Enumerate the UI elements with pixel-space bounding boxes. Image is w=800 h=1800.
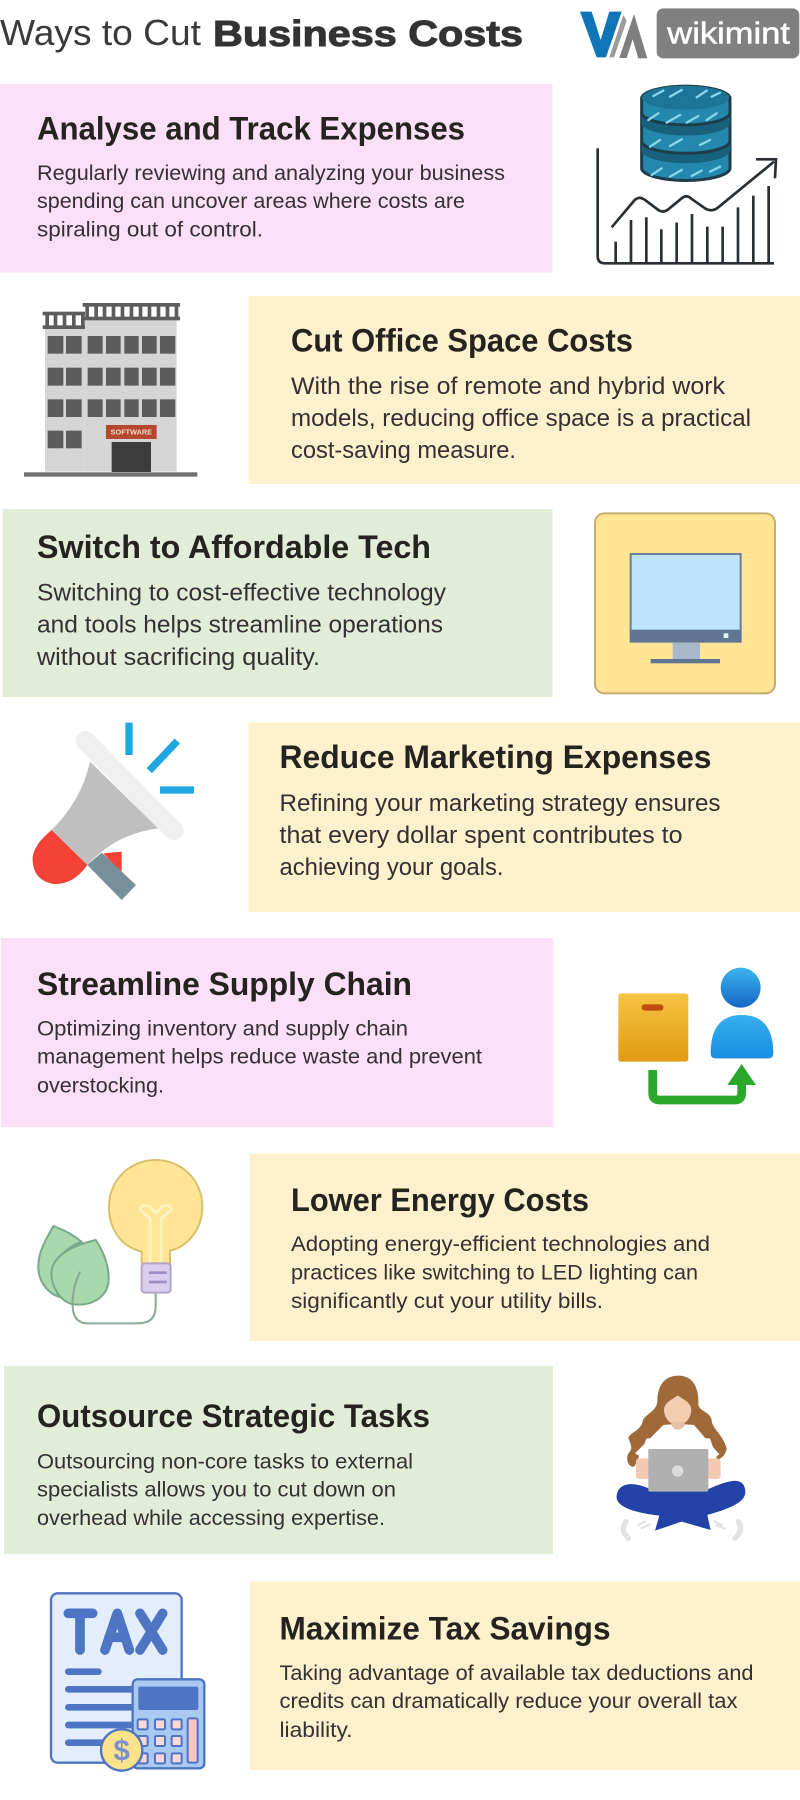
- text block: analyse: Regularly reviewing and analyzing your business: [37, 162, 505, 185]
- text block: energy: significantly cut your utility bills.: [291, 1290, 603, 1313]
- icon: light bulb and leaves: [38, 1160, 202, 1323]
- text block: energy: [291, 1233, 710, 1313]
- text block: tax savings: Taking advantage of available tax deductions and: [280, 1662, 754, 1685]
- text block: analyse: spiraling out of control.: [37, 218, 263, 242]
- text block: supply chain: management helps reduce waste and prevent: [37, 1044, 482, 1068]
- text block: outsource: specialists allows you to cut down on: [37, 1478, 396, 1502]
- text block: office space: With the rise of remote and hybrid work: [291, 373, 726, 400]
- text block: office space: [291, 373, 751, 464]
- text block: marketing: [280, 790, 720, 881]
- text block: outsource: [37, 1450, 413, 1530]
- heading: analyse: Analyse and Track Expenses: [37, 110, 465, 146]
- text block: marketing: achieving your goals.: [280, 854, 504, 881]
- icon: tax form and calculator: [51, 1593, 204, 1771]
- panel: lower energy costs: [250, 1154, 800, 1341]
- text block: marketing: that every dollar spent contributes to: [280, 822, 682, 849]
- text block: affordable tech: Switching to cost-effective technology: [37, 580, 446, 606]
- icon: database and growth chart: [598, 86, 776, 263]
- text block: office space: models, reducing office space is a practical: [291, 405, 751, 432]
- heading: office space: Cut Office Space Costs: [291, 322, 633, 358]
- logo: wikimint: wikimint: [666, 16, 791, 50]
- heading: marketing: Reduce Marketing Expenses: [280, 739, 712, 775]
- panel: reduce marketing expenses: [248, 722, 800, 912]
- title: [0, 12, 523, 54]
- panel: cut office space costs: [248, 296, 800, 484]
- text block: analyse: [37, 162, 505, 242]
- text block: office space: cost-saving measure.: [291, 437, 516, 464]
- heading: supply chain: Streamline Supply Chain: [37, 966, 412, 1002]
- text block: supply chain: overstocking.: [37, 1074, 164, 1098]
- text block: affordable tech: [36, 580, 446, 671]
- text block: outsource: Outsourcing non-core tasks to external: [37, 1450, 413, 1474]
- heading: tax savings: Maximize Tax Savings: [280, 1610, 610, 1646]
- text block: energy: practices like switching to LED lighting can: [291, 1262, 698, 1284]
- text block: affordable tech: and tools helps streamline operations: [37, 612, 443, 638]
- text block: tax savings: [280, 1662, 754, 1742]
- icon: box, person and arrow: [618, 968, 773, 1100]
- heading: outsource: Outsource Strategic Tasks: [37, 1398, 430, 1434]
- text block: outsource: overhead while accessing expertise.: [37, 1507, 385, 1530]
- text block: marketing: Refining your marketing strategy ensures: [280, 790, 720, 817]
- panel: maximize tax savings: [250, 1582, 800, 1770]
- title: Business Costs: [213, 13, 523, 54]
- text block: supply chain: Optimizing inventory and supply chain: [37, 1016, 408, 1040]
- heading: affordable tech: Switch to Affordable Tech: [37, 529, 431, 565]
- icon: woman working on laptop: [617, 1376, 745, 1538]
- logo: wikimint: [580, 8, 799, 58]
- text block: tax savings: credits can dramatically reduce your overall tax: [280, 1690, 738, 1713]
- text block: supply chain: [37, 1016, 482, 1098]
- icon: megaphone: [33, 723, 194, 900]
- text block: tax savings: liability.: [280, 1719, 352, 1742]
- text block: affordable tech: without sacrificing quality.: [36, 644, 320, 671]
- icon: office building: SOFTWARE: [111, 427, 152, 436]
- panel: analyse and track expenses: [0, 84, 552, 272]
- panel: switch to affordable tech: [2, 509, 552, 697]
- panel: outsource strategic tasks: [4, 1366, 553, 1554]
- icon: office building: [24, 303, 197, 477]
- icon: tax form and calculator: $: [114, 1734, 130, 1767]
- panel: streamline supply chain: [1, 938, 553, 1127]
- text block: analyse: spending can uncover areas where costs are: [37, 190, 465, 213]
- title: Ways to Cut: [0, 12, 201, 53]
- icon: computer monitor: [595, 513, 775, 693]
- text block: energy: Adopting energy-efficient technologies and: [291, 1233, 710, 1256]
- heading: energy: Lower Energy Costs: [291, 1182, 589, 1218]
